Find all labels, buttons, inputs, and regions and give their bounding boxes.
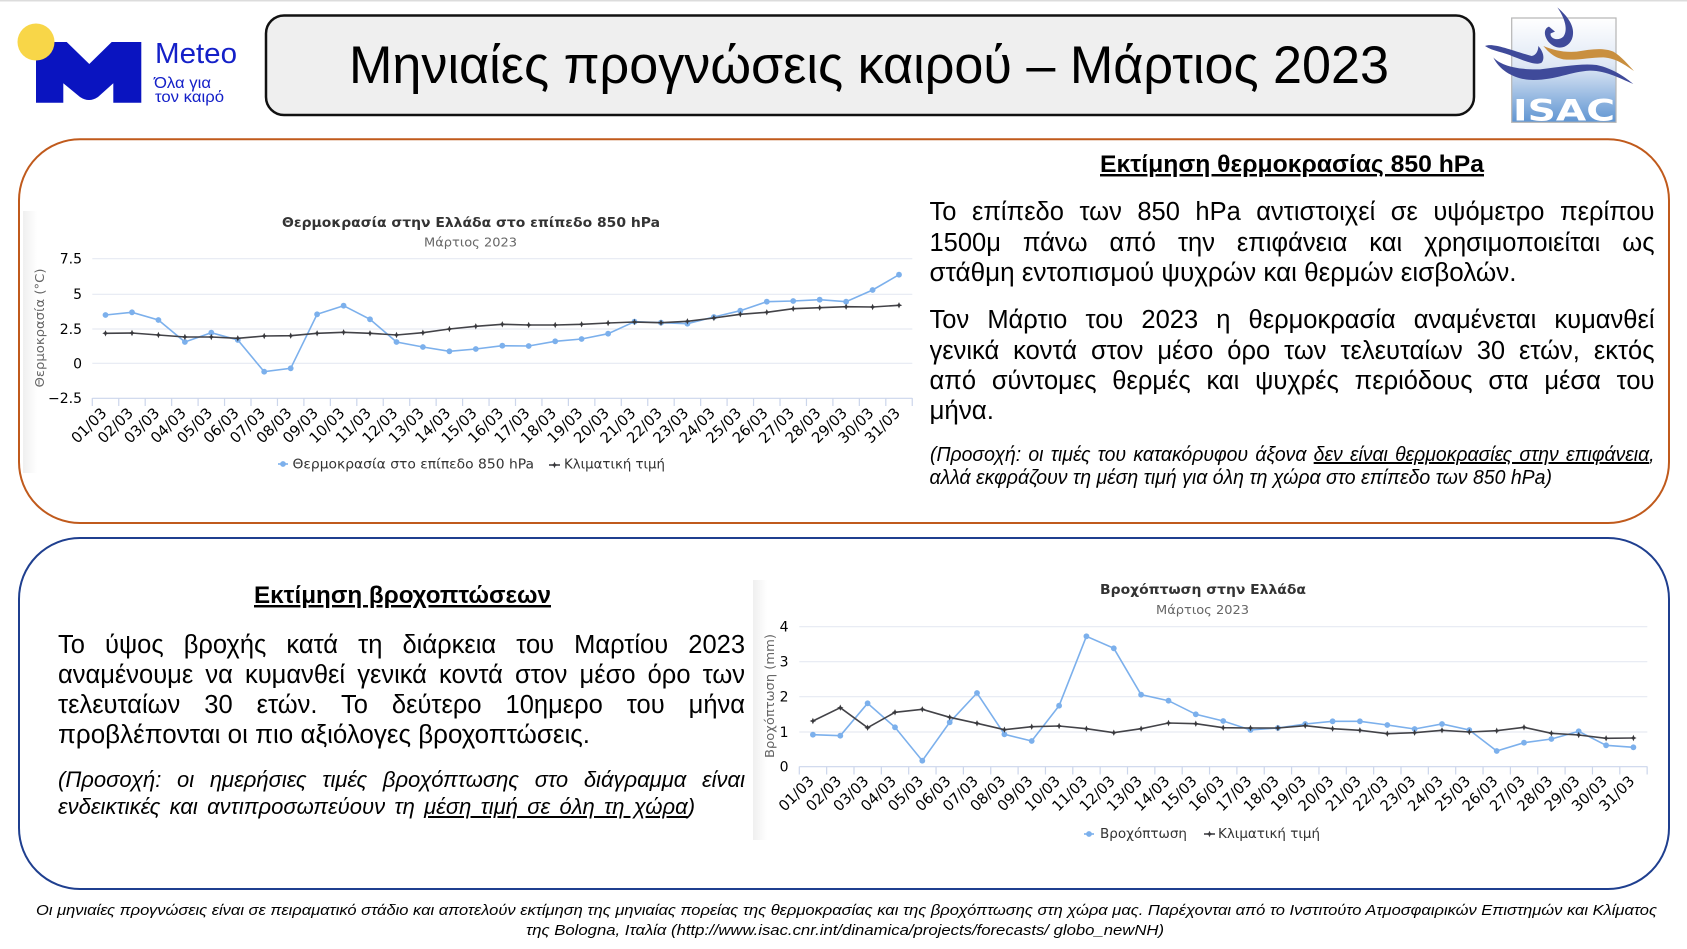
x axis labels: 27/03 (1487, 773, 1529, 815)
x axis labels: 16/03 (1186, 773, 1228, 815)
line chart: temperature at 850 hPa (23, 211, 913, 473)
text block: 850 hPa explanation: στάθμη εντοπισμού ψυχρών και θερμών εισβολών. (930, 259, 1516, 287)
text block: March forecast: μήνα. (930, 397, 994, 425)
text block: March forecast: γενικά κοντά στον μέσο όρο των τελευταίων 30 ετών, εκτός (930, 336, 1654, 364)
x axis labels: 29/03 (809, 405, 851, 447)
x axis labels: 16/03 (465, 405, 507, 447)
x axis labels (776, 773, 1638, 815)
y axis title: Βροχόπτωση (mm) (762, 634, 777, 758)
x axis labels: 27/03 (756, 405, 798, 447)
x axis labels: 04/03 (148, 405, 190, 447)
x axis labels: 22/03 (624, 405, 666, 447)
x axis labels: 07/03 (940, 773, 982, 815)
x axis labels: 21/03 (597, 405, 639, 447)
text block: 850 hPa explanation: Το επίπεδο των 850 hPa αντιστοιχεί σε υψόμετρο περίπου (930, 198, 1654, 226)
x axis labels: 18/03 (518, 405, 560, 447)
note: precipitation (58, 768, 745, 820)
x axis labels: 11/03 (333, 405, 375, 447)
x axis labels: 05/03 (174, 405, 216, 447)
x axis labels: 29/03 (1541, 773, 1584, 815)
footer note: της Bologna, Ιταλία (http://www.isac.cnr.int/dinamica/projects/forecasts/ globo_newNH) (526, 922, 1164, 939)
x axis labels: 01/03 (68, 405, 110, 447)
y axis labels: 4 (780, 620, 789, 636)
title box (266, 16, 1474, 115)
x axis labels: 28/03 (782, 405, 825, 447)
x axis labels: 10/03 (1022, 773, 1064, 815)
icon: Meteo M letter (36, 42, 141, 103)
text block: rainfall forecast: τελευταίων 30 ετών. Το δεύτερο 10ημερο του μήνα (58, 690, 745, 718)
x axis labels: 24/03 (1405, 773, 1447, 815)
series: climatological value (106, 305, 899, 338)
y axis labels: 3 (780, 654, 788, 670)
x axis labels: 08/03 (253, 405, 296, 447)
x axis labels: 24/03 (677, 405, 719, 447)
note: temperature: αλλά εκφράζουν τη μέση τιμή για όλη τη χώρα στο επίπεδο των 850 hPa) (930, 467, 1552, 489)
legend (278, 456, 665, 472)
x axis labels: 09/03 (280, 405, 322, 447)
x axis labels: 19/03 (1268, 773, 1310, 815)
x axis labels: 22/03 (1350, 773, 1392, 815)
text block: rainfall forecast (58, 630, 745, 749)
x axis labels: 25/03 (1432, 773, 1474, 815)
y axis labels: 1 (780, 725, 788, 741)
text block: rainfall forecast: αναμένουμε να κυμανθεί γενικά κοντά στον μέσο όρο των (58, 660, 745, 688)
y axis title: Θερμοκρασία (°C) (32, 268, 47, 388)
x axis labels: 06/03 (200, 405, 243, 447)
x axis labels: 10/03 (306, 405, 348, 447)
note: temperature: (Προσοχή: οι τιμές του κατακόρυφου άξονα δεν είναι θερμοκρασίες στην επιφάνεια, (930, 444, 1654, 466)
x axis labels: 09/03 (994, 773, 1037, 815)
series: temperature at 850 hPa (106, 275, 899, 372)
y axis labels: 0 (73, 356, 82, 372)
x axis labels: 26/03 (729, 405, 772, 447)
y axis labels: −2.5 (48, 391, 82, 407)
x axis labels: 02/03 (803, 773, 845, 815)
x axis labels: 13/03 (386, 405, 428, 447)
x axis labels: 05/03 (885, 773, 927, 815)
panel: precipitation estimate (19, 538, 1669, 889)
x axis labels: 14/03 (412, 405, 454, 447)
logo: Meteo (18, 24, 237, 106)
text block: March forecast: από σύντομες θερμές και ψυχρές περιόδους στα μέσα του (930, 366, 1654, 394)
logo tagline (153, 75, 224, 106)
x axis labels: 12/03 (1076, 773, 1119, 815)
logo tagline: Όλα για (153, 75, 211, 92)
x axis labels: 11/03 (1049, 773, 1091, 815)
logo: ISAC (1485, 7, 1634, 128)
heading: temperature: Εκτίμηση θερμοκρασίας 850 hPa (1100, 151, 1484, 178)
x axis labels: 18/03 (1241, 773, 1283, 815)
title: Μηνιαίες προγνώσεις καιρού – Μάρτιος 2023 (349, 36, 1389, 95)
x axis labels: 26/03 (1459, 773, 1502, 815)
logo tagline: τον καιρό (155, 89, 224, 106)
x axis labels: 25/03 (703, 405, 745, 447)
x axis labels: 20/03 (571, 405, 613, 447)
x axis labels: 31/03 (862, 405, 904, 447)
x axis labels: 02/03 (95, 405, 137, 447)
series: precipitation (813, 636, 1633, 761)
text block: rainfall forecast: προβλέπονται οι πιο αξιόλογες βροχοπτώσεις. (58, 721, 590, 749)
x axis labels: 07/03 (227, 405, 269, 447)
y axis labels (48, 252, 82, 407)
x axis labels: 23/03 (1377, 773, 1419, 815)
series: climatological value (813, 708, 1633, 738)
x axis labels: 20/03 (1295, 773, 1337, 815)
x axis labels: 01/03 (776, 773, 818, 815)
x axis labels: 14/03 (1131, 773, 1173, 815)
x axis labels: 30/03 (835, 405, 877, 447)
logo swooshes (1485, 7, 1634, 84)
y axis labels: 2 (780, 690, 788, 706)
y axis labels: 7.5 (60, 252, 82, 268)
text block: March forecast (930, 304, 1654, 425)
text block: 850 hPa explanation: 1500μ πάνω από την επιφάνεια και χρησιμοποιείται ως (930, 228, 1654, 256)
x axis labels: 19/03 (544, 405, 586, 447)
x axis labels: 30/03 (1569, 773, 1611, 815)
y axis labels (780, 620, 789, 776)
x axis labels: 08/03 (967, 773, 1009, 815)
x axis labels: 21/03 (1323, 773, 1365, 815)
x axis labels: 06/03 (912, 773, 955, 815)
legend: Κλιματική τιμή (1218, 826, 1320, 842)
panel: temperature estimate (19, 139, 1669, 523)
x axis labels: 17/03 (1213, 773, 1255, 815)
x axis labels: 28/03 (1514, 773, 1556, 815)
text block: 850 hPa explanation (930, 196, 1654, 287)
footer note: Οι μηνιαίες προγνώσεις είναι σε πειραματικό στάδιο και αποτελούν εκτίμηση της μηνιαίας πορείας της θερμοκρασίας και της βροχόπτωσης στη χώρα μας. Παρέχονται από το Ινστιτούτο Ατμοσφαιρικών Επιστημών και Κλίματος (36, 902, 1658, 919)
x axis labels: 03/03 (830, 773, 872, 815)
icon: yellow sun (18, 24, 54, 60)
logo square (1512, 18, 1616, 122)
logo wordmark ISAC: ISAC (1513, 94, 1615, 128)
legend: Κλιματική τιμή (564, 456, 665, 472)
text block: rainfall forecast: Το ύψος βροχής κατά τη διάρκεια του Μαρτίου 2023 (58, 630, 745, 658)
x axis labels: 15/03 (1158, 773, 1201, 815)
chart title: Θερμοκρασία στην Ελλάδα στο επίπεδο 850 hPa (282, 215, 660, 231)
chart subtitle: Μάρτιος 2023 (1156, 602, 1249, 617)
chart title: Βροχόπτωση στην Ελλάδα (1100, 582, 1306, 598)
logo wordmark: Meteo (155, 38, 237, 70)
x axis labels: 03/03 (121, 405, 163, 447)
y axis labels: 2.5 (60, 322, 82, 338)
x axis labels: 15/03 (438, 405, 481, 447)
x axis labels: 17/03 (491, 405, 534, 447)
y axis labels: 5 (73, 287, 82, 303)
chart subtitle: Μάρτιος 2023 (424, 234, 517, 250)
note: temperature (930, 442, 1654, 489)
x axis labels: 31/03 (1596, 773, 1638, 815)
legend (1084, 826, 1320, 842)
x axis labels (68, 405, 904, 447)
x axis labels: 23/03 (650, 405, 692, 447)
heading: precipitation: Εκτίμηση βροχοπτώσεων (254, 582, 551, 609)
legend: Βροχόπτωση (1100, 826, 1187, 842)
text block: March forecast: Τον Μάρτιο του 2023 η θερμοκρασία αναμένεται κυμανθεί (930, 306, 1654, 334)
legend: Θερμοκρασία στο επίπεδο 850 hPa (292, 456, 534, 472)
y axis labels: 0 (780, 760, 788, 776)
x axis labels: 12/03 (359, 405, 401, 447)
footer note (36, 902, 1658, 939)
x axis labels: 04/03 (858, 773, 900, 815)
x axis labels: 13/03 (1104, 773, 1146, 815)
line chart: precipitation (753, 580, 1648, 842)
